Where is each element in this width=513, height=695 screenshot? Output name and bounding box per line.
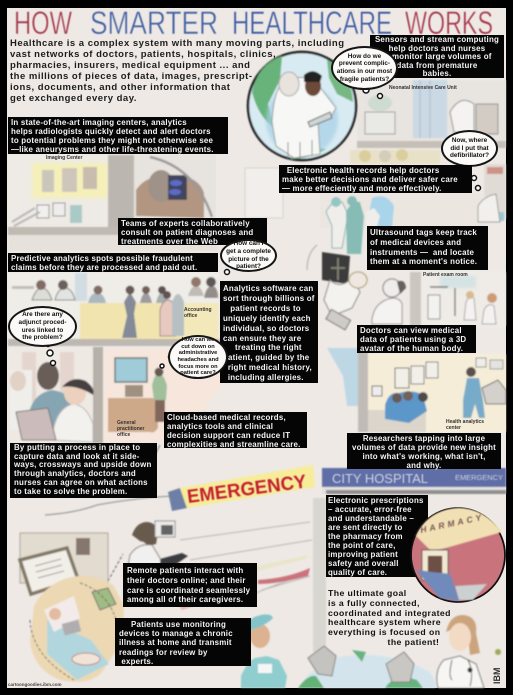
text box: predictive analytics: Predictive analytics spots possible fraudulent claims before they are processed and paid out. <box>11 254 197 272</box>
speech bubble: complications <box>331 46 398 90</box>
speech bubble: adjunct procedures <box>8 306 77 347</box>
label: imaging center: Imaging Center <box>46 155 82 161</box>
expert at screen <box>134 155 283 218</box>
signs: emergency, hospital, pharmacy: EMERGENCY <box>186 471 308 508</box>
text box: process: By putting a process in place to capture data and look at it side- ways, crossways and upside down through analytics, doctors and nurses can agree on what actions to take to solve the problem. <box>14 443 152 496</box>
text box: sensors: Sensors and stream computing help doctors and nurses monitor large volumes of data from premature babies. <box>375 35 499 78</box>
text box: remote patients: Remote patients interact with their doctors online; and their care is coordinated seamlessly among all of their caregivers. <box>127 566 250 604</box>
reception floor <box>8 273 220 346</box>
text box: electronic health records: Electronic health records help doctors make better decisions and deliver safer care — more effeciently and more effectively. <box>282 166 458 193</box>
label: patient exam room: Patient exam room <box>423 272 468 278</box>
speech bubble: administrative headaches: How can we cut down on administrative headaches and focus more on patient care? <box>177 337 219 376</box>
thought dots <box>46 87 480 368</box>
GP office <box>104 349 222 457</box>
doctor <box>437 615 501 688</box>
ambulance <box>45 496 326 652</box>
text box: doctors avatar: Doctors can view medical data of patients using a 3D avatar of the human body. <box>360 326 466 353</box>
3D avatar room <box>324 272 506 330</box>
speech bubble: adjunct procedures: Are there any adjunct proced- ures linked to the problem? <box>19 311 66 341</box>
analytics center <box>327 348 506 432</box>
home patient <box>20 533 124 682</box>
label: health analytics center: Health analytics center <box>446 419 484 431</box>
surgical team <box>307 194 500 284</box>
text box: ultrasound: Ultrasound tags keep track of medical devices and instruments — and locate them at a moment's notice. <box>370 228 477 266</box>
ultimate goal text: The ultimate goal is a fully connected, coordinated and integrated healthcare system where everything is focused on the patient! <box>328 588 451 647</box>
title: HEALTHCARE <box>232 5 392 40</box>
signs: emergency, hospital, pharmacy: CITY HOSPITAL <box>332 471 428 486</box>
speech bubble: defibrillator: Now, where did I put that defibrillator? <box>450 137 489 159</box>
speech bubble: complications: How do we prevent complic- ations in our most fragile patients? <box>337 53 392 83</box>
globe <box>248 52 356 160</box>
title: HOW <box>14 5 73 40</box>
logo: IBM: IBM <box>492 668 502 684</box>
label: general practitioner office: General practitioner office <box>117 420 145 438</box>
speech bubble: administrative headaches <box>168 335 228 379</box>
text box: teams: Teams of experts collaboratively consult on patient diagnoses and treatments over the Web <box>121 219 253 246</box>
text box: monitoring devices: Patients use monitoring devices to manage a chronic illness at home and transmit readings for review by experts. <box>119 620 233 666</box>
text box: researchers: Researchers tapping into large volumes of data provide new insight into what's working, what isn't, and why. <box>352 434 496 470</box>
label: neonatal unit: Neonatal Intensive Care Unit <box>389 85 457 91</box>
signs: emergency, hospital, pharmacy: EMERGENCY <box>455 475 503 482</box>
label: accounting office: Accounting office <box>184 307 212 319</box>
text box: electronic prescriptions: Electronic prescriptions – accurate, error-free and understandable – are sent directly to the pharmacy from the point of care, improving patient safety and overall quality of care. <box>328 496 424 577</box>
text box: imaging centers: In state-of-the-art imaging centers, analytics helps radiologists quickly detect and alert doctors to potential problems they might not otherwise see —like aneurysms and other life-threatening events. <box>11 118 214 154</box>
text box: analytics software: Analytics software can sort through billions of patient records to uniquely identify each individual, so doctors can ensure they are treating the right patient, guided by the right medical history, including allergies. <box>223 284 315 382</box>
credit: cartoongoodies.ibm.com <box>8 682 62 687</box>
intro text: Healthcare is a complex system with many moving parts, including vast networks of doctors, patients, hospitals, clinics, pharmacies, insurers, medical equipment ... and the millions of pieces of data, images, prescript- ions, documents, and other information that get exchanged every day. <box>10 38 345 104</box>
practitioners <box>8 347 103 443</box>
speech bubble: defibrillator <box>441 130 498 167</box>
title <box>14 5 493 40</box>
text box: cloud-based records: Cloud-based medical records, analytics tools and clinical decision support can reduce IT complexities and streamline care. <box>167 413 301 449</box>
imaging room <box>8 155 218 251</box>
documents on globe <box>298 646 436 688</box>
hospital sign band <box>168 465 506 511</box>
speech bubble: complete picture: How can I get a complete picture of the patient? <box>226 240 271 270</box>
NICU room <box>350 80 506 221</box>
nurse <box>241 614 287 688</box>
title: SMARTER <box>90 5 218 40</box>
signs: emergency, hospital, pharmacy: HARMACY <box>419 512 483 535</box>
